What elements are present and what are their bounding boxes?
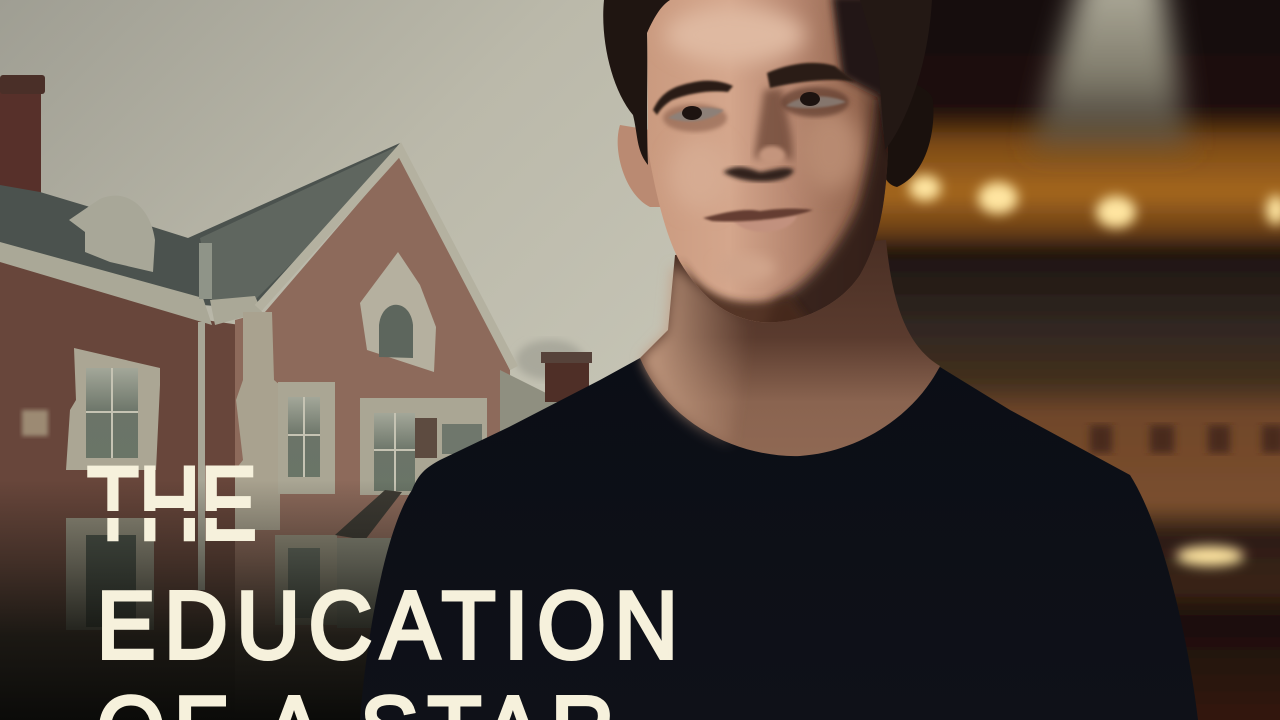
eye white left — [668, 108, 724, 121]
hair right — [860, 0, 932, 150]
distant tree — [516, 340, 584, 380]
hair shadow right — [826, 0, 882, 128]
brick mansion — [0, 75, 620, 720]
mouth — [703, 209, 813, 222]
eyebrow left — [653, 81, 733, 115]
nose tip — [759, 146, 785, 164]
gable brick wall — [235, 155, 512, 720]
lower window left — [66, 518, 154, 630]
bottom fade — [0, 480, 620, 720]
shirt — [360, 358, 1198, 720]
forehead highlight — [665, 7, 805, 63]
eye shade right — [781, 87, 849, 117]
eyebrow right — [767, 63, 855, 88]
title — [87, 446, 678, 720]
roof pillar — [199, 243, 212, 299]
quoin column — [235, 312, 280, 530]
right wing — [500, 370, 600, 720]
downspout — [198, 322, 205, 590]
jaw shadow — [764, 98, 888, 322]
left wing brick wall — [0, 258, 240, 720]
title line: EDUCATION: EDUCATION — [97, 572, 678, 679]
hair back right — [880, 60, 933, 187]
small chimney — [545, 362, 589, 402]
window 1 — [66, 348, 160, 470]
nose base — [723, 167, 794, 182]
lower lip — [733, 216, 797, 232]
window 3 — [360, 398, 487, 495]
eye white right — [786, 96, 846, 108]
face — [647, 0, 888, 322]
chin stubble — [680, 260, 804, 322]
chimney — [0, 86, 41, 206]
blurred theatre stage background — [860, 0, 1280, 720]
iris right — [800, 92, 820, 106]
lower window center — [275, 535, 337, 625]
spotlight beam — [1030, 0, 1190, 150]
neck highlight — [642, 265, 750, 445]
cheek highlight — [672, 148, 714, 202]
neck — [640, 240, 940, 456]
hair left — [603, 0, 670, 165]
ear left — [618, 125, 662, 207]
cornice — [0, 242, 212, 325]
window 2 — [278, 382, 335, 494]
right cheek — [800, 110, 860, 190]
bay roof — [335, 490, 402, 540]
plaque — [22, 410, 48, 436]
bay wall — [337, 538, 407, 628]
nose shadow — [754, 88, 793, 165]
gable trim — [258, 150, 514, 368]
dormer — [69, 196, 155, 272]
background sky — [0, 0, 720, 720]
man — [360, 0, 1198, 720]
title line: THE: THE — [87, 446, 257, 562]
attic window — [360, 252, 436, 372]
iris left — [682, 106, 702, 120]
chin highlight — [748, 258, 774, 278]
roof — [0, 143, 400, 310]
balcony panels — [1090, 425, 1280, 453]
eye shade left — [663, 104, 727, 132]
stage lights — [909, 175, 1280, 566]
